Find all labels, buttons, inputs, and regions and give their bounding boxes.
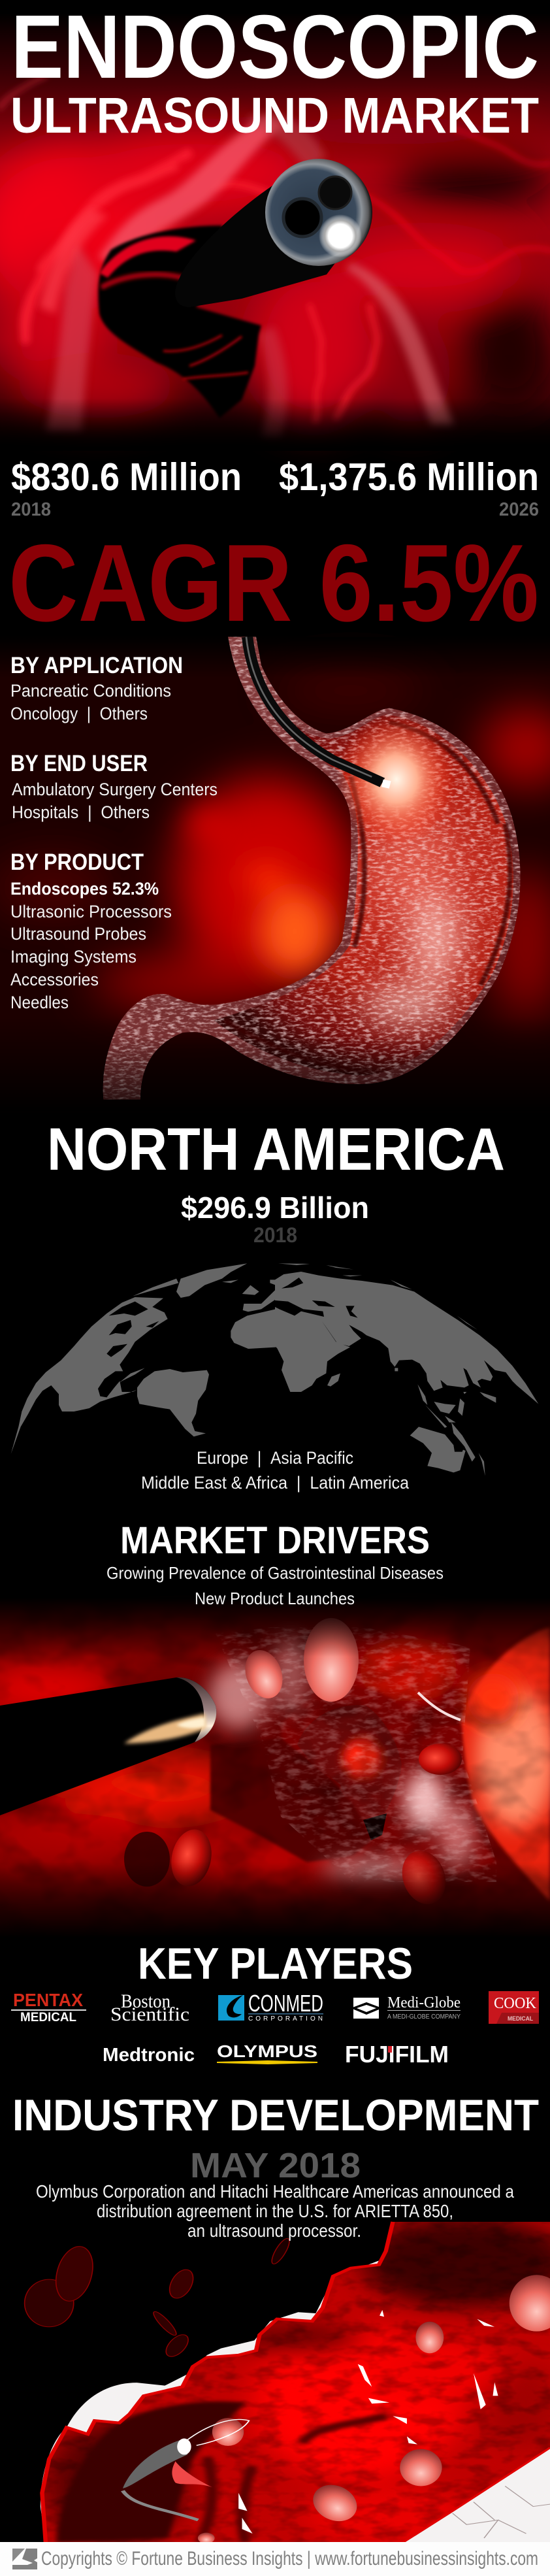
text: oncology and others: Oncology | Others bbox=[10, 704, 148, 723]
logo: Pentax Medical: PENTAX bbox=[13, 1990, 83, 2010]
heading: Key Players: KEY PLAYERS bbox=[138, 1939, 413, 1989]
text: development description line 3: an ultrasound processor. bbox=[187, 2221, 361, 2241]
text: ultrasonic processors: Ultrasonic Processors bbox=[10, 902, 172, 921]
stat label: 2026: 2026 bbox=[499, 499, 539, 520]
logo: ConMed bbox=[218, 1990, 323, 2023]
panel: colon interior illustration bbox=[0, 1598, 550, 1938]
logo: Pentax Medical: MEDICAL bbox=[20, 2011, 76, 2024]
logo: Cook Medical bbox=[489, 1991, 539, 2024]
subheading: May 2018: MAY 2018 bbox=[190, 2146, 361, 2185]
text: ambulatory surgery centers: Ambulatory Surgery Centers bbox=[12, 780, 218, 799]
text: needles: Needles bbox=[10, 993, 69, 1012]
heading: Market Drivers: MARKET DRIVERS bbox=[120, 1519, 430, 1562]
logo: Pentax Medical bbox=[11, 1990, 86, 2024]
text: imaging systems: Imaging Systems bbox=[10, 947, 137, 966]
central lumen and tumour bbox=[210, 1687, 496, 1882]
heading: North America: NORTH AMERICA bbox=[47, 1116, 505, 1183]
logo: Medtronic: Medtronic bbox=[103, 2045, 195, 2066]
icon: polyps bbox=[172, 2275, 550, 2543]
chart: world map globe bbox=[11, 1263, 538, 1476]
pale mucosa streaks bbox=[209, 1627, 496, 1889]
panel: market segments bbox=[10, 653, 218, 1012]
icon: red blood cells bbox=[25, 2237, 293, 2358]
panel: stomach illustration bbox=[0, 634, 550, 1112]
text: pancreatic conditions: Pancreatic Conditions bbox=[10, 681, 171, 701]
icon: endoscope with snare bbox=[123, 2419, 249, 2520]
logo: Medi-Globe: Medi-Globe bbox=[387, 1994, 461, 2011]
logo: Cook Medical: COOK bbox=[494, 1995, 537, 2012]
text: other regions line 1: Europe | Asia Pacific bbox=[197, 1448, 353, 1468]
logo: Boston Scientific: Boston bbox=[121, 1990, 170, 2012]
icon: white outer wall bbox=[40, 2226, 550, 2542]
heading: by end user: BY END USER bbox=[10, 751, 148, 776]
text: development description line 2: distribution agreement in the U.S. for ARIETTA 850, bbox=[97, 2201, 453, 2221]
icon: endoscope cable bbox=[246, 637, 390, 785]
stat: 2018 market size: $830.6 Million bbox=[11, 455, 242, 499]
icon: endoscope tube bbox=[175, 159, 372, 307]
heading: by application: BY APPLICATION bbox=[10, 653, 183, 678]
panel: polyp removal illustration bbox=[0, 2217, 550, 2547]
footer bbox=[0, 2542, 550, 2576]
logo: Olympus: OLYMPUS bbox=[217, 2041, 317, 2061]
logo: Fujifilm: FUJIFILM bbox=[345, 2041, 449, 2068]
stat label: 2018: 2018 bbox=[253, 1223, 297, 1247]
logo: Medi-Globe: A MEDI-GLOBE COMPANY bbox=[387, 2013, 461, 2021]
icon: Fortune Business Insights logo bbox=[12, 2549, 37, 2569]
text: driver 2: New Product Launches bbox=[195, 1589, 355, 1608]
text: driver 1: Growing Prevalence of Gastrointestinal Diseases bbox=[106, 1563, 444, 1583]
pale silk folds bbox=[39, 114, 454, 438]
panel: hero red tissue with endoscope bbox=[0, 13, 550, 451]
stat label: 2018: 2018 bbox=[11, 499, 51, 520]
right bulge of tissue bbox=[461, 1627, 550, 1902]
icon: polyps bbox=[124, 1618, 462, 1910]
logo: Cook Medical: MEDICAL bbox=[508, 2015, 533, 2022]
icon: stomach bbox=[103, 636, 520, 1099]
logo: Medi-Globe bbox=[351, 1994, 461, 2021]
logo: Boston Scientific: Scientific bbox=[110, 2004, 189, 2025]
text: accessories: Accessories bbox=[10, 970, 99, 989]
text: endoscopes share: Endoscopes 52.3% bbox=[10, 879, 159, 899]
icon: red intestinal tissue bbox=[44, 2222, 550, 2542]
stat: North America value: $296.9 Billion bbox=[181, 1191, 369, 1225]
text: hospitals and others: Hospitals | Others bbox=[12, 802, 150, 822]
text: ultrasound probes: Ultrasound Probes bbox=[10, 924, 146, 944]
logo: ConMed: CONMED bbox=[248, 1990, 323, 2017]
logo: ConMed: CORPORATION bbox=[248, 2015, 323, 2023]
logo: Boston Scientific bbox=[110, 1990, 189, 2025]
text: other regions line 2: Middle East & Africa | Latin America bbox=[141, 1473, 410, 1493]
heading: by product: BY PRODUCT bbox=[10, 850, 144, 875]
cavity behind endoscope bbox=[98, 225, 261, 418]
icon: endoscope tip bbox=[0, 1677, 216, 1815]
